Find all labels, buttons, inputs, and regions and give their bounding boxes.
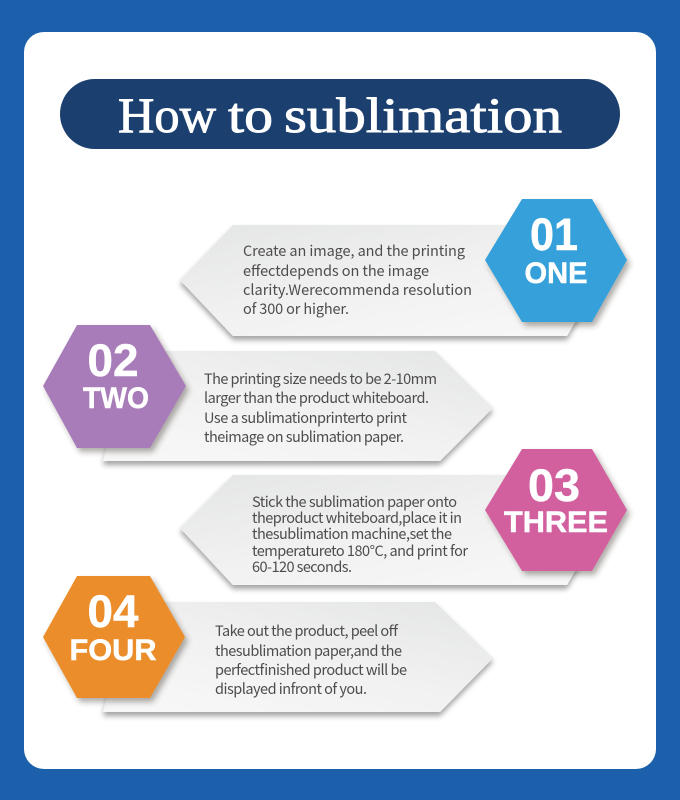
title text: to (228, 87, 273, 143)
step 02 arrow background (103, 351, 493, 461)
step 04 description (215, 620, 407, 699)
step 01 description: of 300 or higher. (243, 298, 349, 319)
step 02 hexagon badge: 02 (88, 335, 138, 386)
step 02 description: theimage on sublimation paper. (204, 426, 404, 447)
step 01 hexagon badge: ONE (524, 257, 588, 290)
step 02 hexagon badge: TWO (83, 382, 149, 415)
step 03 hexagon badge: 03 (528, 460, 580, 511)
step 04 panel (43, 576, 493, 712)
step 01 arrow background (180, 225, 600, 336)
step 04 arrow background (103, 602, 493, 712)
step 03 description (252, 491, 468, 577)
step 04 hexagon badge: 04 (88, 586, 138, 637)
step 04 description: thesublimation paper,and the (215, 640, 402, 661)
step 01 hexagon badge (485, 199, 627, 322)
title banner (60, 79, 620, 149)
step 03 description: theproduct whiteboard,place it in (252, 507, 462, 528)
step 01 description (243, 240, 472, 319)
title text: How (118, 87, 216, 143)
step 02 description: Use a sublimationprinterto print (204, 407, 408, 428)
step 01 description: clarity.Werecommenda resolution (243, 279, 472, 300)
step 03 hexagon badge (485, 449, 627, 571)
step 02 description: larger than the product whiteboard. (204, 387, 429, 408)
step 03 description: Stick the sublimation paper onto (252, 491, 457, 512)
step 04 description: Take out the product, peel off (215, 620, 399, 641)
step 01 panel (180, 199, 627, 336)
step 01 description: effectdepends on the image (243, 260, 429, 281)
title text (118, 87, 562, 143)
step 01 hexagon badge: 01 (530, 209, 578, 260)
step 01 description: Create an image, and the printing (243, 240, 465, 261)
step 04 description: perfectfinished product will be (215, 659, 407, 680)
step 02 hexagon badge (43, 325, 186, 448)
step 03 description: thesublimation machine,set the (252, 523, 452, 544)
step 02 description: The printing size needs to be 2-10mm (204, 368, 437, 389)
step 04 hexagon badge: FOUR (70, 634, 157, 667)
step 03 description: 60-120 seconds. (252, 556, 352, 577)
step 02 panel (43, 325, 493, 461)
step 03 description: temperatureto 180°C, and print for (252, 540, 468, 561)
step 02 description (204, 368, 437, 447)
step 04 hexagon badge (43, 576, 185, 698)
step 03 arrow background (180, 475, 600, 585)
step 03 panel (180, 449, 627, 585)
step 03 hexagon badge: THREE (504, 506, 608, 539)
step 04 description: displayed infront of you. (215, 678, 367, 699)
title text: sublimation (284, 87, 562, 143)
